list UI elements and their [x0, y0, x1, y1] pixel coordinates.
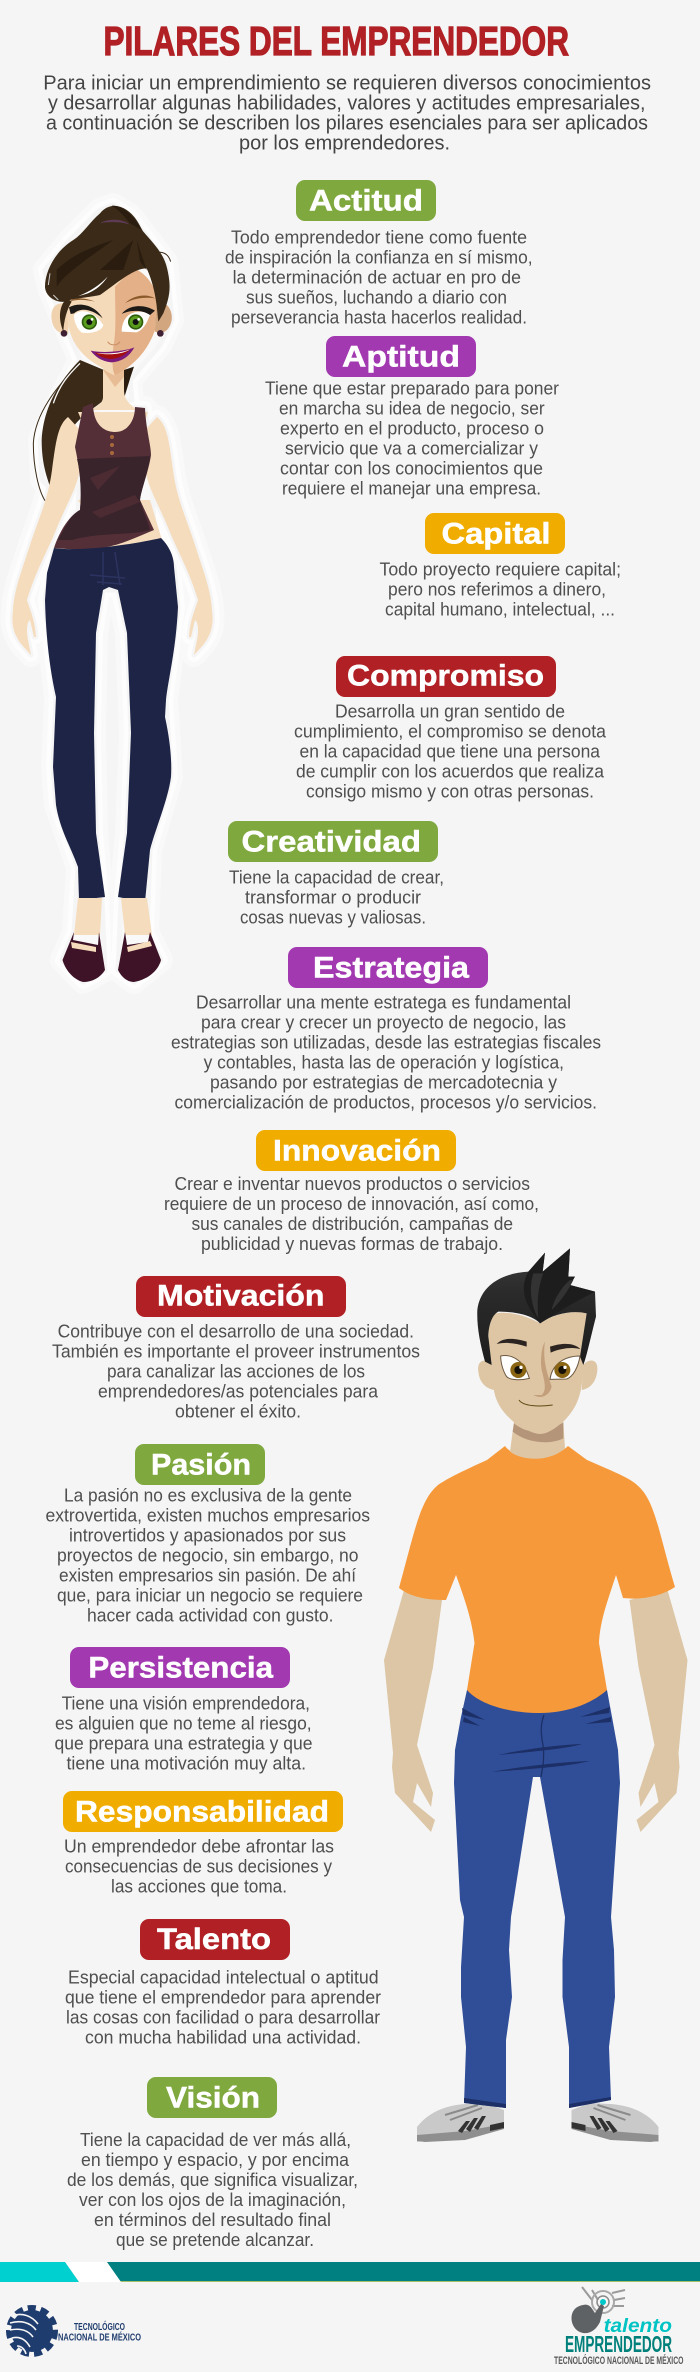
logo: Talento Emprendedor: talento: [604, 2316, 672, 2337]
text: Visión description: de los demás, que significa visualizar,: [67, 2169, 358, 2190]
intro text: y desarrollar algunas habilidades, valores y actitudes empresariales,: [48, 91, 646, 114]
illustration: woman entrepreneur: [12, 205, 213, 982]
text: Motivación description: Contribuye con el desarrollo de una sociedad.: [58, 1320, 414, 1341]
text: Capital description: Todo proyecto requiere capital;: [380, 558, 621, 579]
panel: Motivación: [52, 1276, 420, 1421]
text: Estrategia description: pasando por estrategias de mercadotecnia y: [210, 1071, 558, 1092]
text: Pasión description: extrovertida, existen muchos empresarios: [46, 1505, 370, 1526]
heading: Estrategia: Estrategia: [313, 951, 469, 984]
heading: Estrategia: [288, 947, 488, 988]
text: Pasión description: proyectos de negocio, sin embargo, no: [57, 1545, 358, 1566]
text: Aptitud description: en marcha su idea de negocio, ser: [279, 397, 545, 418]
text: Estrategia description: para crear y crecer un proyecto de negocio, las: [201, 1011, 566, 1032]
text: Aptitud description: contar con los conocimientos que: [280, 457, 543, 478]
text: Capital description: [380, 558, 621, 619]
man: arms: [384, 1590, 688, 1832]
illustration: man entrepreneur: [384, 1248, 688, 2142]
eyes: [501, 1356, 580, 1380]
text: Compromiso description: Desarrolla un gran sentido de: [335, 700, 565, 721]
panel: Visión: [67, 2077, 358, 2250]
text: Talento description: que tiene el emprendedor para aprender: [65, 1986, 381, 2007]
text: Actitud description: Todo emprendedor tiene como fuente: [231, 226, 527, 247]
panel: Responsabilidad: [63, 1791, 343, 1896]
panel: Creatividad: [228, 821, 444, 927]
text: Aptitud description: Tiene que estar preparado para poner: [265, 377, 559, 398]
title: PILARES DEL EMPRENDEDOR: [104, 18, 569, 64]
heading: Compromiso: [336, 656, 556, 697]
text: Capital description: pero nos referimos a dinero,: [388, 578, 606, 599]
heading: Visión: Visión: [166, 2081, 260, 2114]
panel: Persistencia: [54, 1647, 312, 1773]
text: Estrategia description: estrategias son utilizadas, desde las estrategias fiscales: [171, 1031, 601, 1052]
intro text: por los emprendedores.: [239, 131, 450, 154]
man: jeans: [454, 1690, 620, 2108]
woman: ponytail: [33, 360, 134, 501]
hair: [477, 1248, 596, 1365]
panel: Compromiso: [294, 656, 607, 801]
text: Actitud description: sus sueños, luchando a diario con: [246, 286, 507, 307]
heading: Visión: [147, 2077, 277, 2118]
text: Creatividad description: [229, 866, 444, 927]
text: Actitud description: la determinación de actuar en pro de: [233, 266, 521, 287]
text: Persistencia description: [54, 1692, 312, 1773]
heading: Responsabilidad: Responsabilidad: [75, 1795, 329, 1828]
text: Responsabilidad description: las acciones que toma.: [111, 1875, 287, 1896]
logo: Tecnológico Nacional de México: NACIONAL DE MÉXICO: [58, 2330, 141, 2344]
text: Estrategia description: y contables, hasta las de operación y logística,: [204, 1051, 564, 1072]
text: Compromiso description: consigo mismo y con otras personas.: [306, 780, 594, 801]
man: t-shirt: [399, 1446, 675, 1713]
text: Innovación description: Crear e inventar nuevos productos o servicios: [174, 1173, 530, 1194]
woman: jeans: [45, 538, 178, 902]
heading: Capital: Capital: [442, 518, 550, 551]
text: Innovación description: [164, 1173, 539, 1254]
text: Responsabilidad description: consecuencias de sus decisiones y: [65, 1855, 333, 1876]
heading: Compromiso: Compromiso: [347, 660, 544, 693]
heading: Innovación: Innovación: [273, 1135, 441, 1168]
heading: Motivación: [136, 1276, 346, 1317]
text: Aptitud description: experto en el producto, proceso o: [280, 417, 544, 438]
text: Actitud description: de inspiración la confianza en sí mismo,: [225, 246, 533, 267]
hair: [45, 206, 171, 332]
panel: Estrategia: [171, 947, 601, 1112]
text: Pasión description: hacer cada actividad con gusto.: [87, 1605, 334, 1626]
text: Talento description: las cosas con facilidad o para desarrollar: [66, 2006, 380, 2027]
heading: Aptitud: [326, 336, 476, 377]
intro text: [43, 71, 651, 154]
text: Creatividad description: cosas nuevas y valiosas.: [240, 906, 426, 927]
woman: head: [45, 206, 172, 375]
heading: Aptitud: Aptitud: [342, 341, 460, 374]
text: Responsabilidad description: Un emprendedor debe afrontar las: [64, 1835, 334, 1856]
heading: Pasión: [135, 1444, 265, 1485]
text: Aptitud description: servicio que va a comercializar y: [285, 437, 539, 458]
woman: tank top: [54, 403, 154, 550]
text: Motivación description: [52, 1320, 420, 1421]
heading: Motivación: Motivación: [157, 1280, 324, 1313]
heading: Actitud: [296, 180, 436, 221]
heading: Creatividad: Creatividad: [242, 825, 421, 858]
heading: Creatividad: [228, 821, 438, 862]
heading: Innovación: [256, 1130, 456, 1171]
woman: ankles and shoes: [62, 898, 161, 982]
heading: Actitud: Actitud: [309, 185, 423, 218]
text: Estrategia description: comercialización de productos, procesos y/o servicios.: [174, 1091, 597, 1112]
man: shoes: [417, 2103, 658, 2142]
text: Persistencia description: tiene una motivación muy alta.: [66, 1752, 306, 1773]
heading: Talento: [140, 1919, 290, 1960]
text: Responsabilidad description: [64, 1835, 334, 1896]
eyebrows: [497, 1339, 581, 1353]
text: Compromiso description: de cumplir con los acuerdos que realiza: [296, 760, 605, 781]
text: Pasión description: que, para iniciar un negocio se requiere: [57, 1585, 363, 1606]
heading: Talento: Talento: [157, 1923, 271, 1956]
intro text: a continuación se describen los pilares esenciales para ser aplicados: [46, 111, 648, 134]
heading: Pasión: Pasión: [151, 1449, 251, 1482]
nose and mouth: [91, 342, 134, 362]
text: Creatividad description: transformar o producir: [245, 886, 421, 907]
logo: Talento Emprendedor: [554, 2287, 684, 2367]
text: Estrategia description: Desarrollar una mente estratega es fundamental: [196, 991, 571, 1012]
text: Compromiso description: cumplimiento, el compromiso se denota: [294, 720, 607, 741]
heading: Persistencia: Persistencia: [88, 1651, 273, 1684]
footer band: [0, 2262, 700, 2282]
text: Estrategia description: [171, 991, 601, 1112]
heading: Capital: [425, 513, 565, 554]
text: Motivación description: obtener el éxito.: [175, 1400, 301, 1421]
logo: Tecnológico Nacional de México: [9, 2308, 141, 2354]
man: head: [477, 1248, 597, 1459]
eyes: [68, 296, 155, 333]
panel: Pasión: [46, 1444, 370, 1626]
logo: Tecnológico Nacional de México: TECNOLÓGICO: [74, 2320, 125, 2333]
text: Motivación description: emprendedores/as potenciales para: [98, 1380, 379, 1401]
text: Persistencia description: es alguien que no teme al riesgo,: [55, 1712, 312, 1733]
text: Persistencia description: que prepara una estrategia y que: [54, 1732, 312, 1753]
text: Aptitud description: requiere el manejar una empresa.: [282, 477, 541, 498]
text: Actitud description: perseverancia hasta hacerlos realidad.: [231, 306, 527, 327]
text: Innovación description: requiere de un proceso de innovación, así como,: [164, 1193, 539, 1214]
text: Pasión description: La pasión no es exclusiva de la gente: [64, 1485, 352, 1506]
text: Visión description: Tiene la capacidad de ver más allá,: [80, 2129, 351, 2150]
text: Motivación description: También es importante el proveer instrumentos: [52, 1340, 420, 1361]
ears and earrings: [51, 301, 172, 337]
text: Creatividad description: Tiene la capacidad de crear,: [229, 866, 444, 887]
panel: Actitud: [225, 180, 533, 327]
text: Persistencia description: Tiene una visión emprendedora,: [62, 1692, 310, 1713]
text: Aptitud description: [265, 377, 559, 498]
text: Innovación description: sus canales de distribución, campañas de: [192, 1213, 513, 1234]
panel: Aptitud: [265, 336, 559, 498]
ears: [478, 1360, 597, 1390]
panel: Innovación: [164, 1130, 539, 1254]
text: Innovación description: publicidad y nuevas formas de trabajo.: [201, 1233, 503, 1254]
text: Pasión description: existen empresarios sin pasión. De ahí: [59, 1565, 357, 1586]
woman: arms: [12, 365, 213, 655]
text: Talento description: [65, 1966, 381, 2047]
icon: pointing hand with target: [571, 2287, 625, 2333]
text: Visión description: que se pretende alcanzar.: [116, 2229, 314, 2250]
text: Pasión description: introvertidos y apasionados por sus: [69, 1525, 346, 1546]
nose and mouth: [519, 1342, 553, 1406]
panel: Talento: [65, 1919, 381, 2047]
text: Visión description: [67, 2129, 358, 2250]
text: Actitud description: [225, 226, 533, 327]
icon: gear with eagle: [9, 2308, 55, 2354]
intro text: Para iniciar un emprendimiento se requieren diversos conocimientos: [43, 71, 651, 94]
heading: Persistencia: [70, 1647, 290, 1688]
text: Compromiso description: [294, 700, 607, 801]
text: Motivación description: para canalizar las acciones de los: [107, 1360, 365, 1381]
text: Talento description: Especial capacidad intelectual o aptitud: [68, 1966, 379, 1987]
text: Visión description: ver con los ojos de la imaginación,: [79, 2189, 346, 2210]
heading: Responsabilidad: [63, 1791, 343, 1832]
text: Talento description: con mucha habilidad una actividad.: [85, 2026, 361, 2047]
panel: Capital: [380, 513, 621, 619]
text: Capital description: capital humano, intelectual, ...: [385, 598, 615, 619]
text: Compromiso description: en la capacidad que tiene una persona: [300, 740, 601, 761]
text: Visión description: en tiempo y espacio, y por encima: [81, 2149, 350, 2170]
text: Visión description: en términos del resultado final: [94, 2209, 331, 2230]
text: Pasión description: [46, 1485, 370, 1626]
